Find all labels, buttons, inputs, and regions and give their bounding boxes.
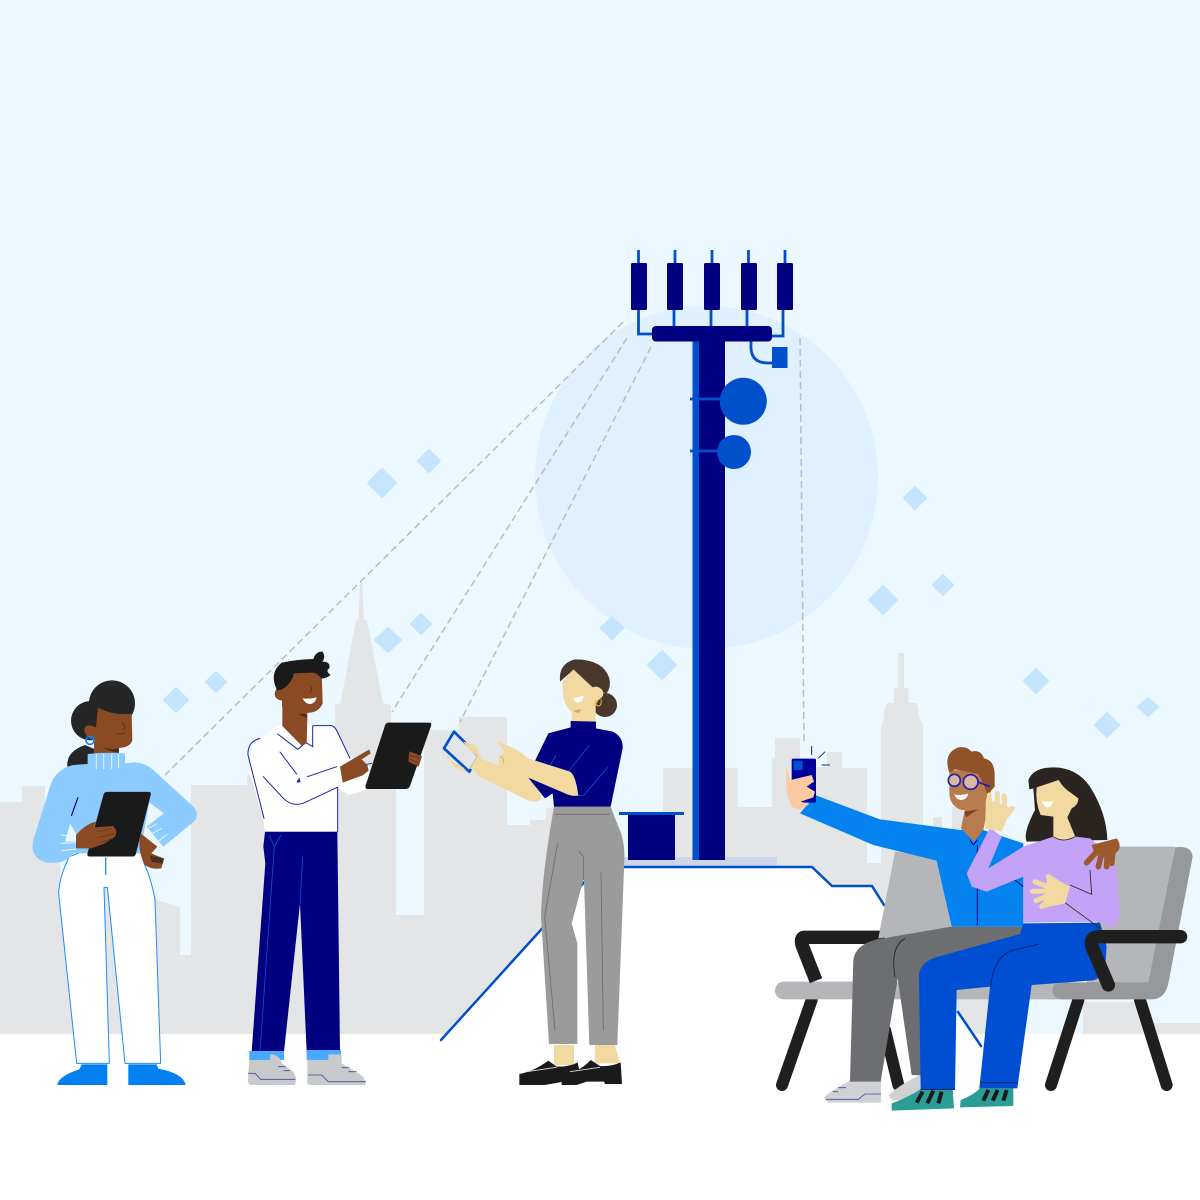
man shoes <box>824 1081 881 1103</box>
person: woman with tablet <box>32 680 197 1085</box>
woman top <box>967 828 1120 928</box>
person: man with tablet <box>248 652 431 1085</box>
phone <box>444 732 479 772</box>
trousers <box>59 850 161 1063</box>
chair back left <box>878 852 952 938</box>
woman trousers <box>919 923 1107 1090</box>
bench chair <box>775 847 1193 1085</box>
sneakers <box>248 1054 296 1085</box>
blouse <box>527 721 623 807</box>
pointing arm <box>497 741 578 796</box>
shirt <box>249 725 370 832</box>
person: woman with phone <box>444 659 624 1085</box>
man hair <box>947 747 995 795</box>
shoes <box>57 1064 107 1085</box>
phone hand <box>446 742 481 773</box>
neck and head <box>282 700 307 746</box>
hands <box>76 822 116 848</box>
tablet <box>88 792 150 856</box>
face and neck <box>84 707 132 755</box>
right armrest <box>1091 937 1181 985</box>
trousers <box>252 832 340 1052</box>
man trousers <box>850 927 1023 1082</box>
glasses <box>948 774 990 789</box>
seat <box>775 982 1075 999</box>
phone <box>792 759 816 803</box>
waving hand <box>985 793 1012 832</box>
left armrest <box>801 937 885 981</box>
woman hair <box>1026 767 1107 842</box>
person: couple taking a selfie <box>786 746 1181 1111</box>
lower arm <box>472 758 542 802</box>
man hand on shoulder <box>1087 838 1120 867</box>
trousers <box>541 807 624 1045</box>
chair legs <box>782 1000 1167 1085</box>
tablet <box>365 723 431 789</box>
man neck and head <box>961 795 987 842</box>
man shirt and arm <box>800 795 1023 927</box>
hair <box>593 693 617 717</box>
sweater <box>32 753 197 863</box>
hands <box>340 749 371 783</box>
cuffs <box>249 1050 341 1060</box>
cell tower <box>619 250 793 860</box>
rooftop platform <box>0 857 1200 1200</box>
face and neck <box>563 669 603 723</box>
legs <box>554 1045 620 1065</box>
hair <box>274 652 331 691</box>
signal diamonds <box>164 450 1158 737</box>
woman shoes <box>892 1088 954 1111</box>
chair back right <box>1087 847 1175 983</box>
hand on waist <box>1033 876 1070 908</box>
shoes <box>519 1061 579 1085</box>
city skyline <box>0 580 1200 1034</box>
hair <box>67 680 135 767</box>
woman face and neck <box>1036 780 1078 842</box>
dashed signal lines <box>165 322 804 775</box>
large pale circle behind tower <box>535 306 878 649</box>
